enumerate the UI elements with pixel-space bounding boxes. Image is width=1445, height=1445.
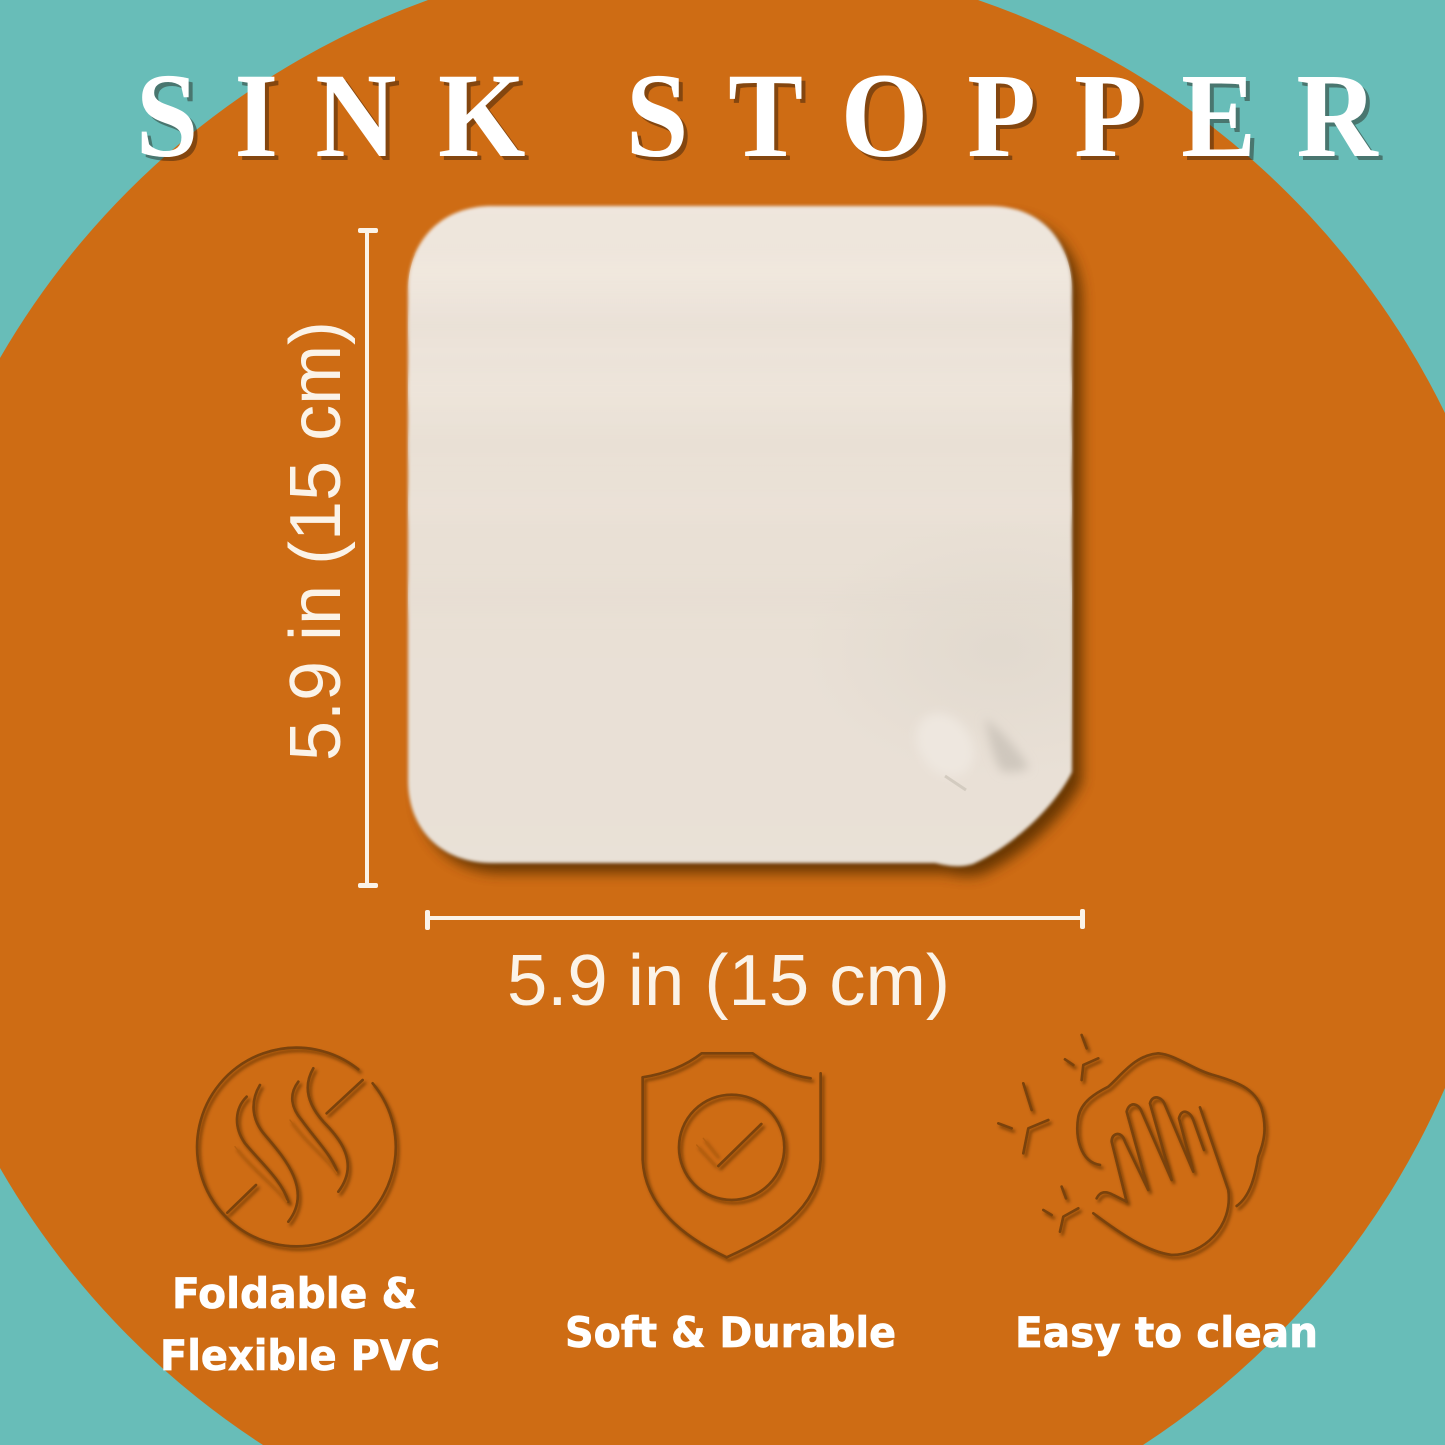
icon: hand wiping with cloth / easy to clean xyxy=(998,1035,1265,1255)
dimension: height bracket xyxy=(358,228,378,888)
title: SINK STOPPER xyxy=(136,49,1379,183)
label: soft and durable: Soft & Durable xyxy=(565,1308,896,1357)
icon: shield with check / durable xyxy=(643,1053,821,1257)
label: foldable and flexible PVC: Flexible PVC xyxy=(160,1331,440,1380)
label: foldable and flexible PVC xyxy=(160,1269,440,1380)
label: easy to clean: Easy to clean xyxy=(1015,1308,1318,1357)
icon: no steam / foldable xyxy=(197,1048,396,1246)
dimension: width label: 5.9 in (15 cm) xyxy=(507,941,950,1021)
product: silicone sink stopper pad xyxy=(406,204,1091,885)
label: foldable and flexible PVC: Foldable & xyxy=(172,1269,417,1318)
dimension: width bracket xyxy=(425,909,1085,930)
dimension: height label: 5.9 in (15 cm) xyxy=(276,321,356,761)
